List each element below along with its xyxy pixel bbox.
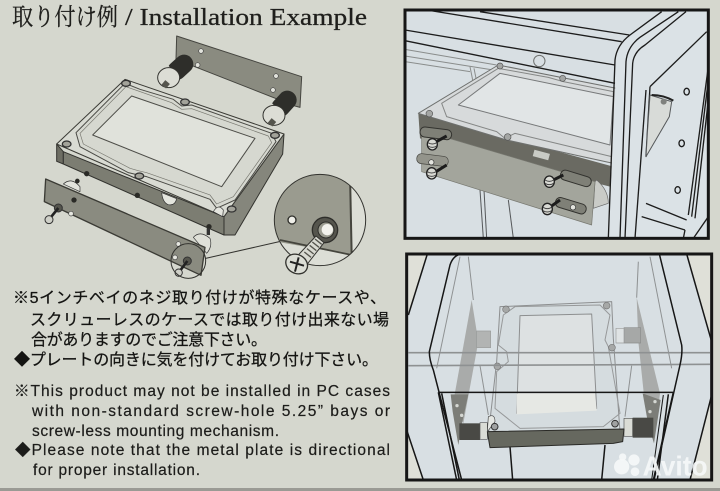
text block: English notes: with non-standard screw-hole 5.25” bays or bbox=[31, 403, 390, 420]
front standoffs bbox=[63, 179, 212, 253]
panel: installed in case, side view bbox=[405, 10, 708, 238]
watermark: Avito bbox=[614, 451, 708, 482]
drive seen through case side bbox=[646, 95, 673, 157]
case front pillar bbox=[608, 10, 708, 238]
rear mounting plate bbox=[176, 36, 302, 107]
text block: Japanese notes: スクリューレスのケースでは取り付け出来ない場 bbox=[30, 311, 389, 329]
front mounting plate bbox=[44, 179, 205, 276]
case corners bbox=[408, 256, 426, 310]
text block: English notes bbox=[14, 383, 390, 479]
case outline bbox=[407, 254, 712, 480]
callout pointer bbox=[171, 242, 279, 278]
case rails bbox=[408, 257, 710, 417]
diagram: exploded hard drive installation bbox=[44, 36, 366, 278]
watermark: Avito: Avito bbox=[643, 451, 708, 482]
mounting plate with slots and screws bbox=[416, 126, 608, 225]
case rails bbox=[405, 10, 629, 238]
text block: Japanese notes: ※5インチベイのネジ取り付けが特殊なケースや、 bbox=[13, 289, 386, 307]
drive front face bbox=[487, 416, 624, 448]
text block: English notes: for proper installation. bbox=[33, 462, 200, 479]
text block: Japanese notes bbox=[13, 289, 389, 369]
front plates and standoffs bbox=[451, 393, 661, 445]
drive outline bbox=[488, 302, 620, 435]
translucent rear plates and standoffs bbox=[453, 298, 660, 423]
panel: installed in case, top view bbox=[407, 254, 712, 482]
title: 取り付け例 bbox=[12, 4, 118, 31]
callout: screw detail bbox=[267, 167, 366, 278]
rear standoff left bbox=[158, 64, 184, 89]
case mounting holes bbox=[675, 88, 689, 193]
hard drive bbox=[57, 79, 284, 235]
text block: Japanese notes: 合がありますのでご注意下さい。 bbox=[31, 331, 267, 349]
text block: English notes: screw-less mounting mechanism. bbox=[32, 423, 279, 440]
text block: English notes: ◆Please note that the metal plate is directional bbox=[15, 441, 390, 459]
text block: Japanese notes: ◆プレートの向きに気を付けてお取り付け下さい。 bbox=[14, 351, 378, 369]
title bbox=[12, 4, 367, 31]
text block: English notes: ※This product may not be installed in PC cases bbox=[14, 383, 390, 400]
hard drive in bay bbox=[418, 63, 617, 187]
rear standoff right bbox=[263, 100, 287, 127]
title: / Installation Example bbox=[125, 5, 367, 31]
